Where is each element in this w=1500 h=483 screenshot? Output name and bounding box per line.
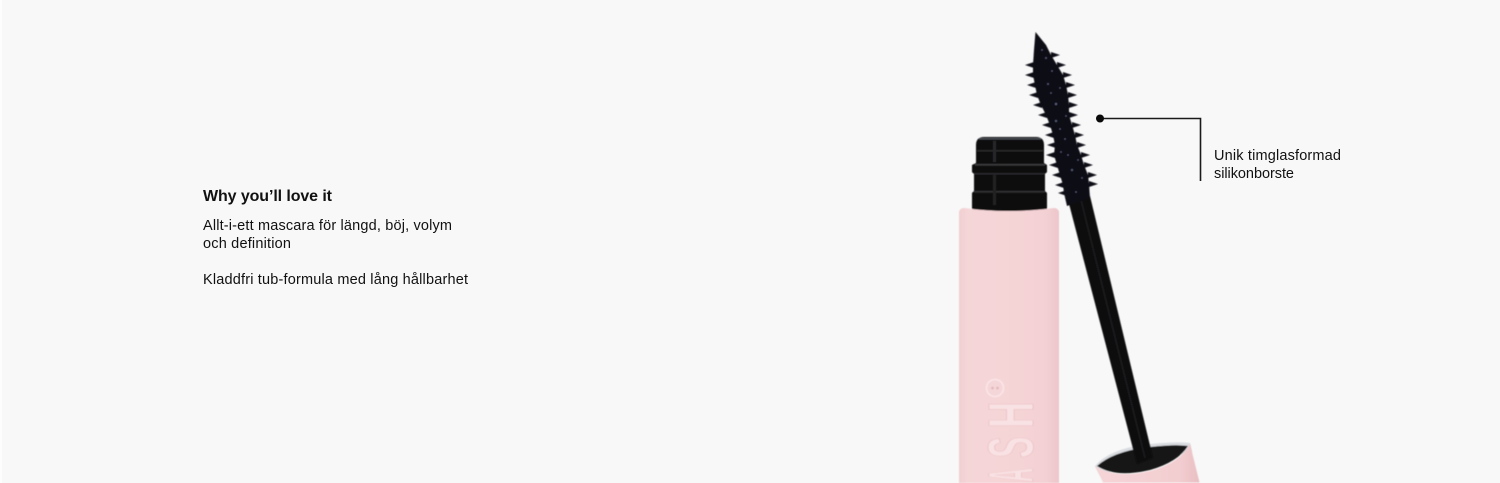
callout text: Unik timglasformad	[1214, 148, 1341, 164]
text block: why you'll love it	[203, 188, 468, 288]
tube body	[959, 208, 1059, 483]
benefit: all-in-one mascara: Allt-i-ett mascara för längd, böj, volym	[203, 218, 452, 234]
wand stem	[1068, 196, 1153, 464]
benefit: all-in-one mascara: och definition	[203, 236, 291, 252]
benefit: tubing formula: Kladdfri tub-formula med lång hållbarhet	[203, 272, 468, 288]
tube neck	[972, 137, 1047, 214]
callout text: silikonborste	[1214, 166, 1294, 182]
embossed logo	[975, 380, 1048, 482]
mascara cap	[1095, 444, 1200, 482]
benefit: all-in-one mascara	[203, 218, 452, 252]
mascara wand	[1025, 32, 1153, 464]
mascara tube	[959, 137, 1059, 483]
callout dot	[1096, 114, 1104, 122]
brush head	[1025, 32, 1098, 206]
embossed logo: A	[976, 468, 1048, 482]
embossed logo: H	[976, 402, 1048, 428]
heading: Why you’ll love it	[203, 188, 333, 205]
callout text	[1214, 148, 1341, 182]
mascara cap opening	[1095, 442, 1192, 475]
callout: brush	[1096, 114, 1341, 182]
embossed logo: S	[975, 437, 1047, 458]
leader line	[1100, 118, 1200, 181]
